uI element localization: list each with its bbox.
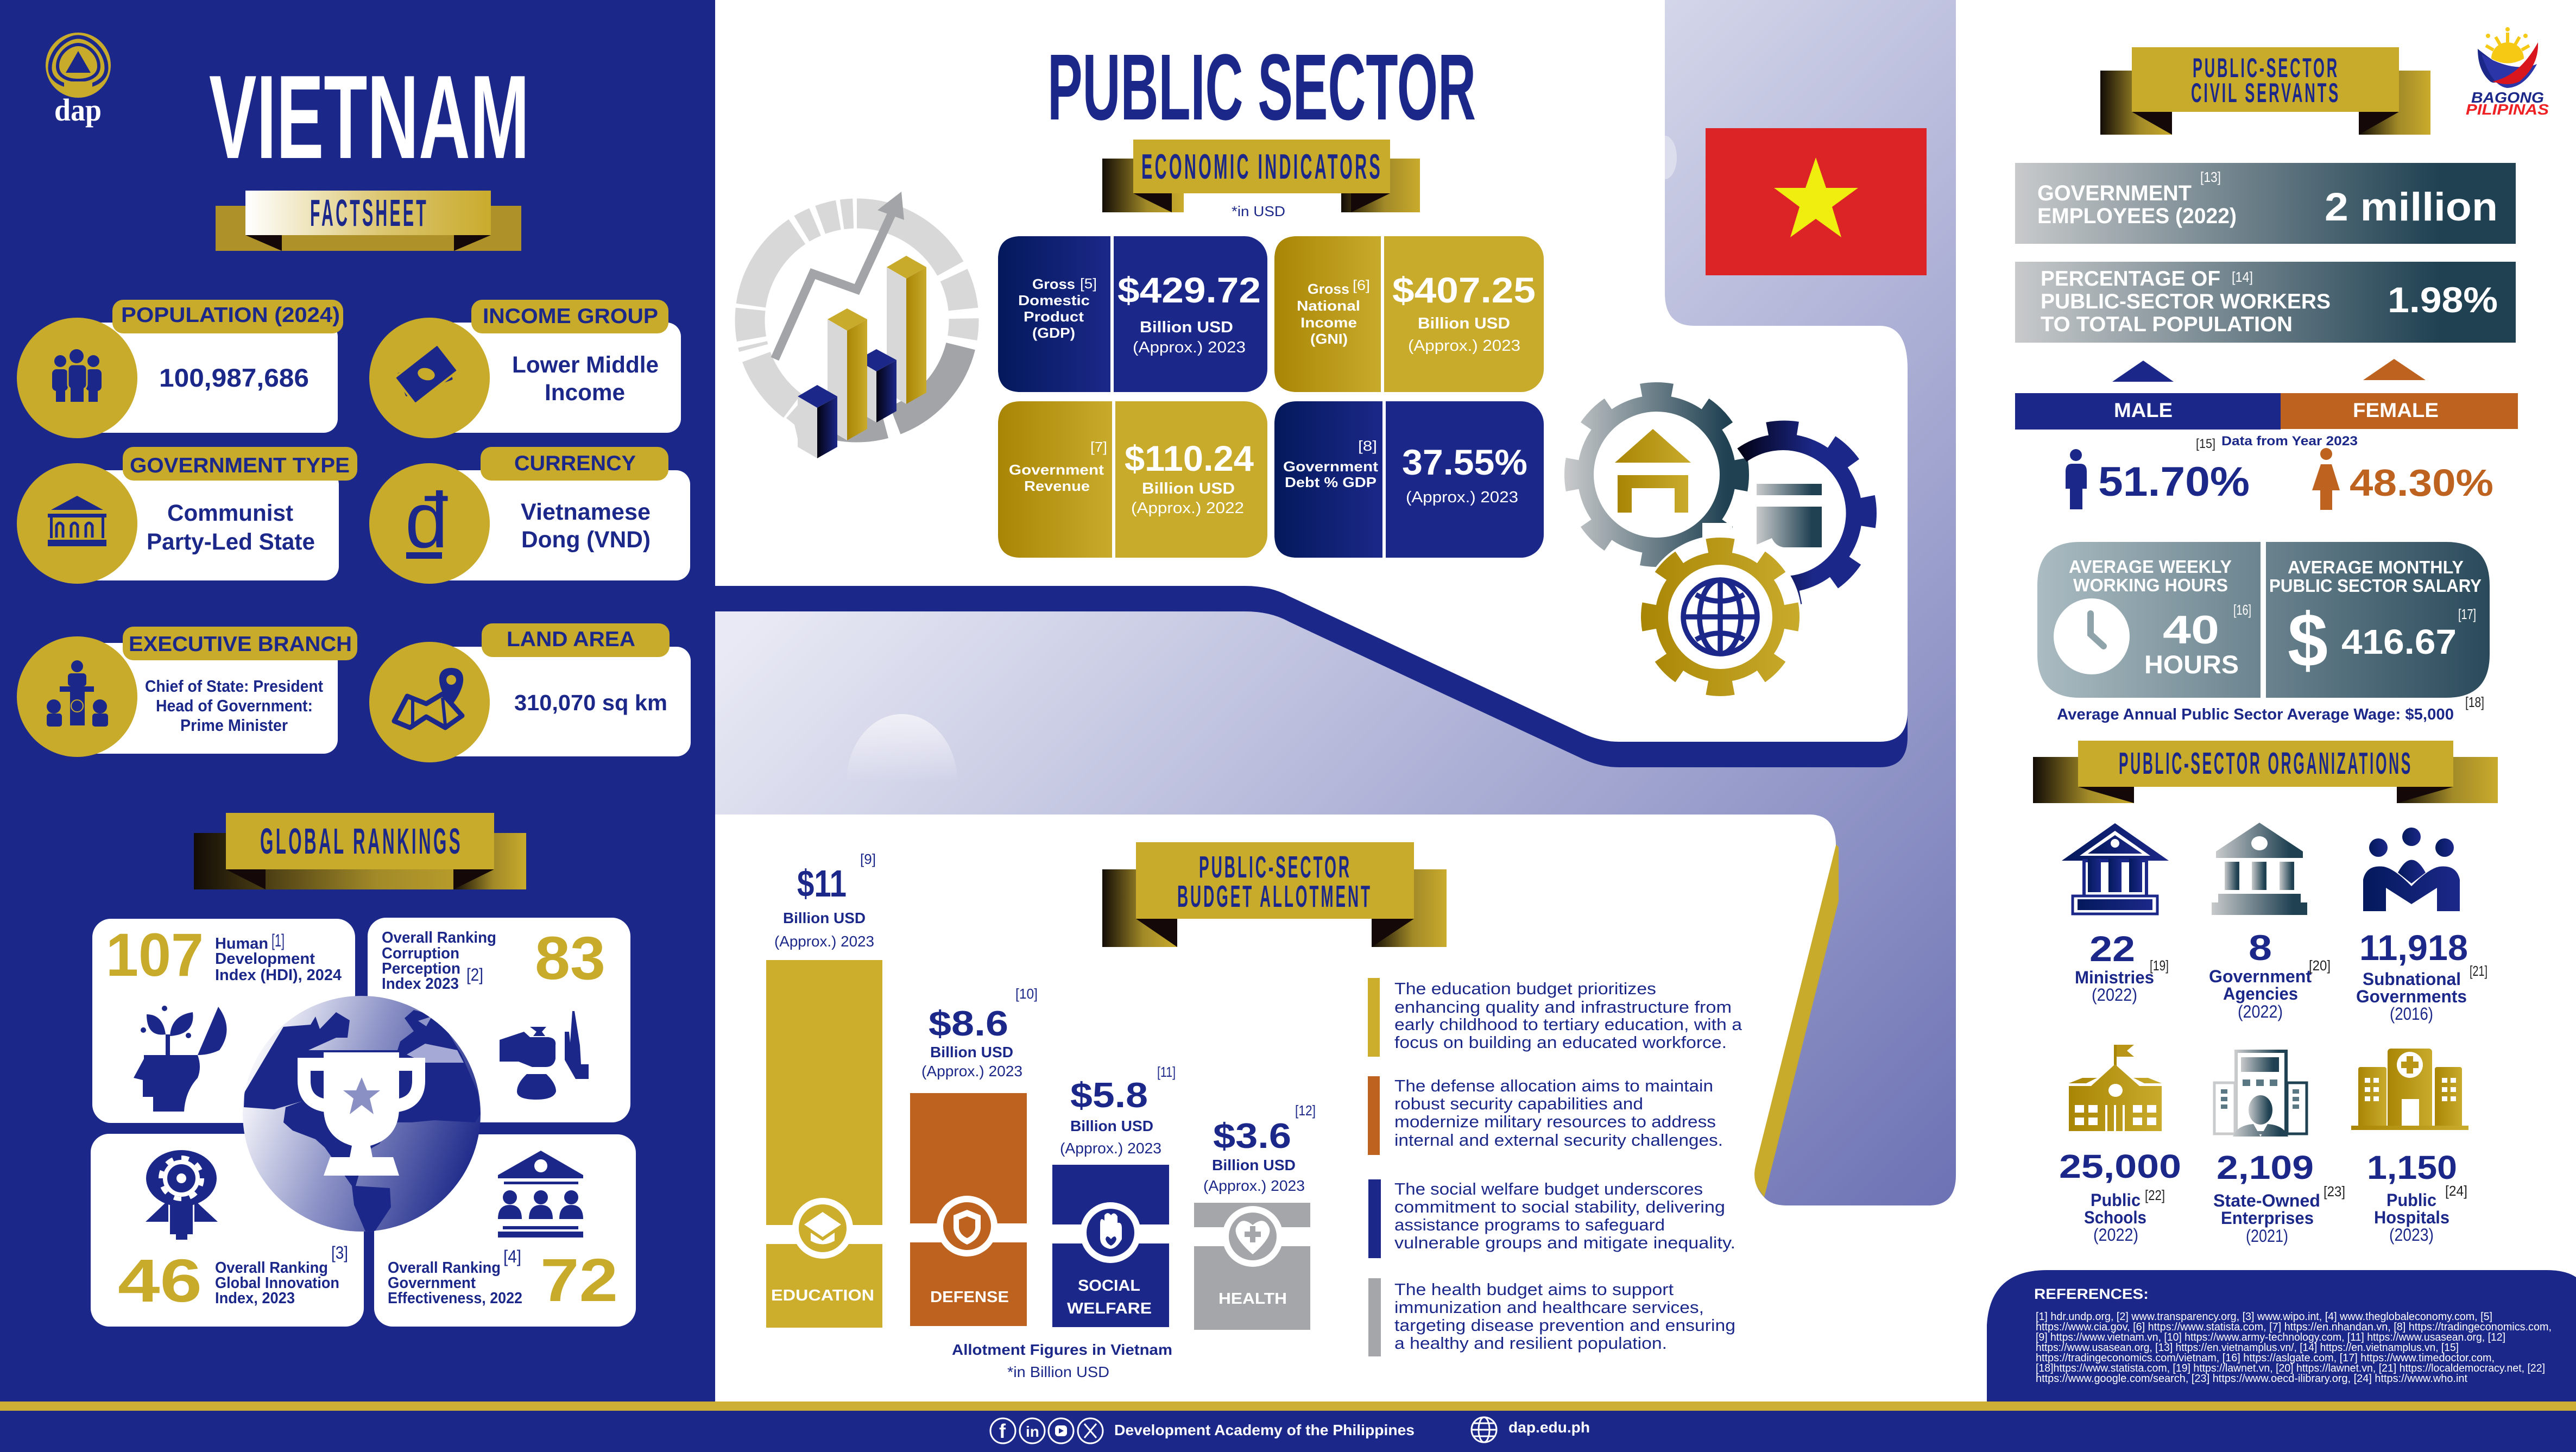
bar: social welfare: SOCIAL	[1078, 1277, 1140, 1295]
org: public hospitals	[2351, 1049, 2468, 1245]
icon: corporate building	[2214, 1051, 2307, 1137]
icon: three gears	[1572, 390, 1869, 698]
pill: currency label	[481, 447, 668, 481]
org: state-owned enterprises: State-Owned	[2213, 1191, 2320, 1210]
stat: percent of population: PUBLIC-SECTOR WORKERS	[2041, 290, 2331, 313]
icon: refusing bribe	[500, 1011, 589, 1100]
footer organization text: Development Academy of the Philippines	[1114, 1422, 1415, 1438]
chart caption: *in Billion USD	[1007, 1363, 1109, 1380]
icon: school	[2069, 1045, 2162, 1131]
references text: [18]https://www.statista.com, [19] https://lawnet.vn, [20] https://lawnet.vn, [21] https://localdemocracy.net, [22]	[2036, 1362, 2545, 1374]
card: corruption perception: 83	[535, 924, 605, 992]
text block: education budget: focus on building an educated workforce.	[1394, 1033, 1727, 1052]
org: public hospitals: [24]	[2445, 1183, 2467, 1199]
logo: DAP: dap	[54, 92, 102, 128]
org: subnational governments	[2356, 828, 2487, 1024]
box: government debt: (Approx.) 2023	[1406, 489, 1518, 506]
ribbon: civil servants	[2100, 47, 2430, 135]
icon: rocket gear	[146, 1150, 218, 1240]
org: state-owned enterprises: 2,109	[2217, 1149, 2314, 1186]
left navy panel	[0, 0, 715, 1412]
card: corruption perception: Overall Ranking	[382, 929, 496, 946]
label text: POPULATION (2024)	[121, 304, 340, 327]
references text: [9] https://www.vietnam.vn, [10] https://www.army-technology.com, [11] https://www.usasean.org, [12]	[2036, 1331, 2505, 1343]
org: subnational governments: Subnational	[2363, 969, 2461, 989]
label text: LAND AREA	[507, 628, 635, 651]
label text: CURRENCY	[514, 452, 636, 475]
references text: https://www.cia.gov, [6] https://www.statista.com, [7] https://en.nhandan.vn, [8] https://tradingeconomics.com,	[2036, 1321, 2552, 1333]
value: health: [12]	[1295, 1102, 1316, 1119]
card: human development	[92, 919, 355, 1123]
stat: government employees	[2015, 163, 2516, 244]
org: agencies: [20]	[2309, 957, 2331, 974]
icon: government building	[48, 496, 106, 546]
card: executive branch	[17, 627, 357, 757]
panel: working hours: 40	[2163, 608, 2219, 652]
card: human development: Development	[215, 950, 315, 968]
card: innovation index: [3]	[331, 1243, 348, 1262]
ribbon: factsheet	[216, 191, 521, 251]
references text: [1] hdr.undp.org, [2] www.transparency.org, [3] www.wipo.int, [4] www.theglobaleconomy.com, [5]	[2036, 1311, 2492, 1323]
icon: agency building	[2212, 823, 2307, 915]
org: public schools: [22]	[2145, 1187, 2165, 1203]
references text: https://www.google.com/search, [23] https://www.oecd-ilibrary.org, [24] https://www.who.int	[2036, 1373, 2467, 1385]
value: 100,987,686	[159, 363, 309, 392]
ribbon: civil servants: PUBLIC-SECTOR	[2193, 53, 2339, 83]
gender split	[2015, 359, 2518, 510]
org: public hospitals: Hospitals	[2374, 1208, 2449, 1227]
value: education: (Approx.) 2023	[774, 933, 874, 950]
panel: working hours: WORKING HOURS	[2073, 575, 2228, 595]
icons: social media: f	[999, 1420, 1006, 1442]
box: GNI: National	[1297, 298, 1360, 314]
icon: people group	[2363, 828, 2460, 911]
value	[147, 500, 315, 555]
card: government effectiveness: Government	[388, 1274, 476, 1292]
icon: rising bar chart	[750, 192, 964, 458]
box: government revenue: Revenue	[1024, 478, 1090, 494]
flag: Vietnam	[1706, 128, 1927, 275]
value	[521, 499, 651, 553]
center bottom white panel	[715, 815, 1836, 1412]
text block: health budget: a healthy and resilient population.	[1394, 1334, 1667, 1353]
globe and trophy	[243, 996, 481, 1232]
references text: https://www.usasean.org, [13] https://en.vietnamplus.vn/, [14] https://en.vietnamplus.vn, [15]	[2036, 1342, 2459, 1354]
value: Lower Middle	[512, 352, 659, 378]
card: human development: Human	[215, 935, 268, 952]
stat: government employees: 2 million	[2325, 185, 2498, 229]
ribbon: global rankings	[194, 813, 526, 889]
bar: social welfare: WELFARE	[1067, 1300, 1152, 1317]
ribbon: economic indicators	[1102, 140, 1420, 212]
value: Head of Government:	[156, 696, 313, 715]
box: GDP: Billion USD	[1140, 319, 1233, 336]
ribbon: budget allotment: PUBLIC-SECTOR	[1199, 850, 1352, 885]
icon: male figure	[2066, 449, 2087, 509]
bar: defense: DEFENSE	[930, 1289, 1009, 1306]
value: social welfare: [11]	[1157, 1064, 1176, 1080]
text block: defense budget	[1368, 1076, 1723, 1155]
note: annual wage: Average Annual Public Sector Average Wage: $5,000	[2057, 706, 2454, 723]
card: innovation index: Global Innovation	[215, 1274, 339, 1292]
box: government debt: Debt % GDP	[1285, 474, 1377, 490]
org: state-owned enterprises: [23]	[2324, 1183, 2345, 1200]
panel: monthly salary	[2266, 542, 2490, 698]
text block: education budget	[1368, 978, 1742, 1057]
box: government revenue: Government	[1009, 462, 1104, 478]
value: health: Billion USD	[1212, 1157, 1296, 1173]
org: agencies: Agencies	[2223, 984, 2298, 1003]
logo: Bagong Pilipinas	[2466, 27, 2549, 118]
bar: education: EDUCATION	[771, 1287, 874, 1304]
text block: defense budget: The defense allocation aims to maintain	[1394, 1076, 1713, 1095]
label text: INCOME GROUP	[483, 305, 658, 328]
org: public hospitals: 1,150	[2367, 1149, 2457, 1186]
value: defense: $8.6	[929, 1003, 1008, 1043]
value: education: [9]	[860, 851, 876, 867]
title: Vietnam: VIETNAM	[209, 51, 529, 184]
box: GNI: Gross	[1308, 281, 1349, 297]
org: agencies	[2209, 823, 2331, 1021]
box: government debt	[1274, 401, 1544, 558]
icon: money	[395, 344, 458, 404]
stat: percent of population: [14]	[2232, 269, 2253, 285]
icon: map and pin	[394, 668, 463, 728]
value	[512, 352, 659, 406]
value: social welfare: (Approx.) 2023	[1060, 1140, 1161, 1157]
text block: health budget: targeting disease prevention and ensuring	[1394, 1316, 1735, 1335]
value: education: Billion USD	[783, 910, 866, 926]
gear: house	[1572, 390, 1741, 559]
lavender bump lower	[847, 714, 957, 782]
center lavender backdrop	[715, 0, 1956, 1205]
org: state-owned enterprises: Enterprises	[2221, 1208, 2314, 1228]
value: education	[774, 851, 876, 950]
box: GDP: (Approx.) 2023	[1133, 339, 1246, 356]
panel: monthly salary: $	[2288, 597, 2328, 683]
value: Chief of State: President	[145, 677, 323, 696]
continents	[244, 1010, 481, 1232]
trophy	[304, 1052, 419, 1176]
card: government effectiveness: 72	[540, 1246, 618, 1314]
icon: ministry building	[2062, 823, 2169, 914]
icons: social media: in	[1026, 1423, 1039, 1440]
value: defense: Billion USD	[930, 1044, 1013, 1060]
label text: EXECUTIVE BRANCH	[129, 633, 352, 656]
value: health: $3.6	[1213, 1116, 1291, 1156]
icon: institution people	[498, 1151, 583, 1238]
org: public hospitals: (2023)	[2389, 1225, 2434, 1245]
text block: education budget: The education budget prioritizes	[1394, 979, 1656, 998]
org: ministries	[2062, 823, 2169, 1005]
org: public hospitals: Public	[2386, 1190, 2436, 1210]
text block: social welfare budget: vulnerable groups and mitigate inequality.	[1394, 1233, 1735, 1252]
box: GNI: $407.25	[1392, 270, 1536, 310]
box: government revenue: [7]	[1090, 439, 1107, 455]
text block: social welfare budget: commitment to social stability, delivering	[1394, 1197, 1725, 1216]
box: GNI: (Approx.) 2023	[1408, 337, 1520, 355]
box: GNI	[1274, 236, 1544, 392]
box: GDP: $429.72	[1117, 270, 1261, 310]
org: ministries: 22	[2089, 929, 2135, 969]
box: government debt: Government	[1283, 458, 1378, 475]
org: subnational governments: (2016)	[2390, 1004, 2433, 1024]
card: corruption perception: [2]	[466, 965, 483, 984]
bar: female	[2281, 393, 2518, 429]
org: subnational governments: 11,918	[2359, 927, 2468, 968]
card: human development: 107	[106, 921, 204, 989]
card: innovation index: 46	[118, 1247, 202, 1315]
value	[145, 677, 323, 735]
chart caption	[952, 1341, 1172, 1380]
card: corruption perception: Perception	[382, 960, 460, 977]
ribbon: budget allotment	[1102, 842, 1447, 947]
ribbon: civil servants: CIVIL SERVANTS	[2191, 78, 2340, 108]
pill: population label	[112, 300, 343, 333]
box: government revenue	[998, 401, 1267, 558]
box: GDP: Domestic	[1018, 292, 1090, 308]
value: Communist	[167, 500, 293, 526]
box: government revenue: (Approx.) 2022	[1131, 500, 1244, 517]
text block: defense budget: internal and external security challenges.	[1394, 1131, 1723, 1150]
text block: social welfare budget: assistance programs to safeguard	[1394, 1215, 1665, 1234]
org: agencies: 8	[2249, 927, 2272, 968]
lavender bump upper	[1653, 136, 1677, 179]
card: corruption perception: Corruption	[382, 945, 459, 962]
box: GNI: Billion USD	[1418, 315, 1510, 332]
box: GNI: [6]	[1353, 277, 1370, 293]
text block: health budget: immunization and healthcare services,	[1394, 1298, 1704, 1317]
ribbon: budget allotment: BUDGET ALLOTMENT	[1177, 879, 1372, 914]
value: health: (Approx.) 2023	[1203, 1177, 1305, 1194]
text block: health budget: The health budget aims to support	[1394, 1280, 1674, 1299]
icon: head with plant	[134, 1006, 227, 1112]
value: social welfare: $5.8	[1070, 1075, 1148, 1115]
label: male: MALE	[2114, 399, 2173, 421]
note: annual wage: [18]	[2465, 694, 2484, 710]
org: subnational governments: Governments	[2356, 987, 2467, 1006]
value: Vietnamese	[521, 499, 651, 525]
label text: GOVERNMENT TYPE	[130, 454, 350, 477]
box: GDP: (GDP)	[1032, 325, 1075, 341]
center top white panel	[715, 0, 1908, 742]
panel: working hours: [16]	[2233, 602, 2251, 618]
stat: percent of population	[2015, 262, 2516, 343]
references heading: REFERENCES:	[2034, 1286, 2149, 1302]
card: government effectiveness: Overall Ranking	[388, 1259, 501, 1277]
value: Party-Led State	[147, 529, 315, 555]
org: public schools: Public	[2091, 1190, 2141, 1210]
value: social welfare: Billion USD	[1070, 1118, 1153, 1134]
label: female: FEMALE	[2353, 399, 2439, 421]
gear: window	[1742, 428, 1869, 598]
arrow: male	[2112, 361, 2174, 382]
org: public schools: Schools	[2084, 1208, 2146, 1227]
bar: education	[766, 960, 882, 1328]
box: government debt: [8]	[1358, 438, 1377, 454]
value: Income	[545, 380, 625, 406]
card: income group	[369, 300, 681, 438]
ribbon: organizations	[2033, 741, 2498, 803]
box: GDP: [5]	[1080, 275, 1097, 292]
icon: hospital	[2351, 1049, 2468, 1130]
value: defense: [10]	[1015, 986, 1038, 1002]
value: Dong (VND)	[521, 527, 651, 553]
card: population	[17, 300, 343, 438]
references text	[2036, 1311, 2552, 1385]
bar: health	[1194, 1203, 1310, 1330]
org: public schools	[2059, 1045, 2181, 1245]
value: male share: 51.70%	[2098, 459, 2250, 505]
card: government type	[17, 447, 357, 584]
box: government revenue: $110.24	[1125, 438, 1254, 478]
org: subnational governments: [21]	[2470, 963, 2487, 979]
icon: clock	[2054, 598, 2130, 674]
card: human development: Index (HDI), 2024	[215, 967, 342, 984]
arrow: female	[2363, 359, 2426, 380]
text block: social welfare budget: The social welfare budget underscores	[1394, 1179, 1703, 1198]
panel: monthly salary: [17]	[2458, 606, 2476, 622]
source year: [15]	[2196, 437, 2215, 451]
pill: executive label	[123, 627, 357, 660]
logo: DAP	[46, 33, 111, 128]
card: government effectiveness: [4]	[503, 1247, 521, 1266]
bar: social welfare	[1052, 1165, 1169, 1327]
gear: globe	[1639, 535, 1802, 698]
value: health	[1203, 1102, 1316, 1194]
pill: government label	[123, 447, 357, 481]
box: GNI: (GNI)	[1310, 331, 1348, 347]
box: GNI: Income	[1300, 314, 1357, 331]
references panel	[1987, 1270, 2576, 1412]
card: innovation index: Index, 2023	[215, 1290, 295, 1307]
box: government revenue: Billion USD	[1142, 480, 1235, 497]
stat: government employees: [13]	[2200, 169, 2221, 185]
card: human development: [1]	[272, 931, 285, 950]
org: agencies: Government	[2209, 967, 2312, 986]
card: land area	[369, 623, 691, 762]
panel: working hours: AVERAGE WEEKLY	[2069, 557, 2232, 577]
source year	[2196, 434, 2358, 451]
footer	[0, 1402, 2576, 1452]
pill: income label	[471, 300, 668, 333]
navy band	[715, 26, 1908, 767]
icon: executive podium	[47, 660, 108, 727]
card: government effectiveness	[374, 1134, 636, 1327]
bar: male	[2015, 393, 2281, 430]
source year: Data from Year 2023	[2221, 434, 2358, 449]
references text: https://tradingeconomics.com/vietnam, [16] https://aslgate.com, [17] https://www.timedoctor.com,	[2036, 1352, 2495, 1364]
value: defense: (Approx.) 2023	[921, 1063, 1022, 1079]
ribbon: factsheet: FACTSHEET	[310, 192, 428, 234]
logo: Bagong Pilipinas: PILIPINAS	[2466, 101, 2549, 118]
footer url: dap.edu.ph	[1508, 1419, 1590, 1436]
value: Prime Minister	[180, 716, 288, 735]
stat: government employees: GOVERNMENT	[2037, 181, 2192, 205]
icon: people	[52, 349, 102, 402]
ribbon: global rankings: GLOBAL RANKINGS	[260, 821, 463, 862]
card: innovation index	[91, 1134, 364, 1327]
stat: percent of population: PERCENTAGE OF	[2041, 267, 2220, 291]
text block: defense budget: robust security capabilities and	[1394, 1094, 1643, 1113]
card: innovation index: Overall Ranking	[215, 1259, 328, 1277]
box: government debt: 37.55%	[1402, 442, 1527, 482]
org: state-owned enterprises: (2021)	[2246, 1226, 2288, 1246]
org: ministries: [19]	[2150, 957, 2169, 974]
panel: monthly salary: 416.67	[2341, 622, 2457, 661]
card: currency	[369, 447, 690, 584]
icons: social media	[990, 1418, 1103, 1443]
stat: percent of population: TO TOTAL POPULATION	[2041, 313, 2293, 336]
value: 310,070 sq km	[514, 690, 667, 715]
bar: health: HEALTH	[1218, 1290, 1287, 1308]
value: education: $11	[797, 862, 847, 905]
ribbon: economic indicators: ECONOMIC INDICATORS	[1141, 147, 1382, 186]
title: Public Sector: PUBLIC SECTOR	[1047, 34, 1476, 140]
chart: budget bars	[766, 851, 1316, 1380]
value: defense	[921, 986, 1038, 1079]
note: annual wage	[2057, 694, 2484, 723]
org: ministries: (2022)	[2092, 985, 2137, 1005]
org: ministries: Ministries	[2075, 968, 2154, 987]
note: in USD: *in USD	[1232, 203, 1285, 219]
org: public schools: 25,000	[2059, 1148, 2181, 1185]
text block: education budget: early childhood to tertiary education, with a	[1394, 1015, 1742, 1034]
stat: percent of population: 1.98%	[2388, 280, 2498, 320]
value: female share: 48.30%	[2350, 462, 2493, 504]
card: corruption perception: Index 2023	[382, 975, 459, 993]
text block: defense budget: modernize military resources to address	[1394, 1112, 1716, 1131]
chart caption: Allotment Figures in Vietnam	[952, 1341, 1172, 1358]
org: state-owned enterprises	[2213, 1051, 2345, 1246]
panel: monthly salary: PUBLIC SECTOR SALARY	[2269, 576, 2482, 596]
bar: defense	[910, 1093, 1027, 1326]
panel: monthly salary: AVERAGE MONTHLY	[2288, 557, 2464, 577]
text block: social welfare budget	[1368, 1179, 1735, 1258]
pill: land label	[482, 623, 670, 657]
card: corruption perception	[368, 918, 630, 1122]
org: agencies: (2022)	[2238, 1002, 2283, 1021]
value: social welfare	[1060, 1064, 1176, 1157]
gold strip	[1751, 844, 1839, 1197]
icon: web globe	[1472, 1417, 1497, 1442]
box: GDP	[998, 236, 1267, 392]
org: public schools: (2022)	[2093, 1225, 2138, 1245]
logo: Bagong Pilipinas: BAGONG	[2471, 89, 2544, 106]
icon: dong symbol: đ	[405, 476, 448, 564]
text block: health budget	[1368, 1278, 1735, 1356]
icon: female figure	[2312, 448, 2340, 510]
panel: working hours: HOURS	[2144, 650, 2239, 679]
panel: working hours	[2037, 542, 2261, 698]
box: GDP: Gross	[1032, 276, 1075, 292]
text block: education budget: enhancing quality and infrastructure from	[1394, 998, 1732, 1017]
card: government effectiveness: Effectiveness, 2022	[388, 1290, 522, 1307]
box: GDP: Product	[1024, 308, 1084, 325]
stat: government employees: EMPLOYEES (2022)	[2037, 204, 2237, 228]
